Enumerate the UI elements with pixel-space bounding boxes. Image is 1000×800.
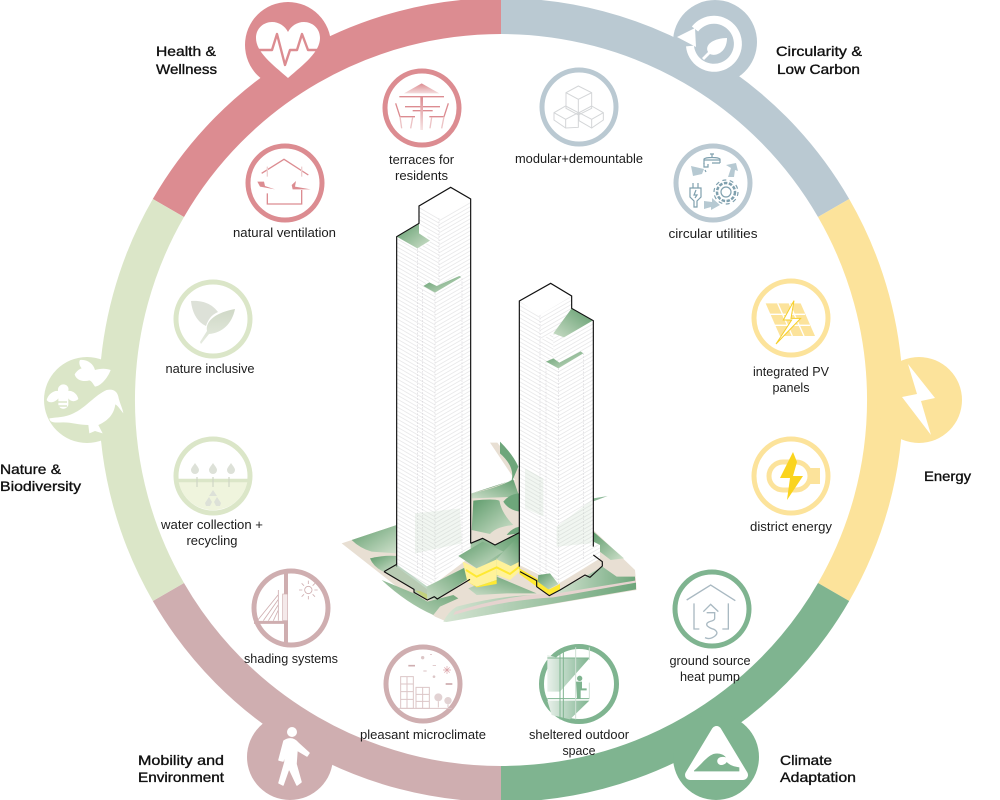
heading: Nature & Biodiversity: Biodiversity	[0, 478, 81, 494]
badge: climate wave triangle	[673, 714, 759, 800]
label: terraces for residents: residents	[395, 168, 449, 183]
label: shading systems: shading systems	[244, 651, 338, 666]
label: integrated PV panels: integrated PV	[753, 364, 829, 379]
yellow base and black site outline	[384, 533, 602, 600]
heading: Nature & Biodiversity: Nature &	[0, 461, 62, 477]
icon: ground source heat pump	[675, 572, 749, 646]
tap	[704, 154, 720, 164]
label: sheltered outdoor space	[529, 727, 630, 758]
heading: Energy: Energy	[924, 468, 971, 484]
heading: Climate Adaptation: Adaptation	[780, 769, 856, 785]
icon: integrated PV panels	[754, 281, 828, 355]
icon: circular utilities	[676, 146, 750, 220]
segment: Climate Adaptation	[501, 592, 834, 784]
label: ground source heat pump: ground source	[670, 653, 750, 668]
heading: Circularity & Low Carbon: Low Carbon	[777, 61, 860, 77]
badge: circular arrow with leaf	[673, 0, 757, 84]
label: district energy: district energy	[750, 519, 833, 534]
segment: Circularity & Low Carbon	[501, 16, 834, 208]
heading: Mobility and Environment	[138, 752, 224, 785]
heading: Mobility and Environment: Environment	[138, 769, 224, 785]
label: integrated PV panels	[753, 364, 829, 395]
badge: energy bolt	[876, 357, 962, 443]
label: ground source heat pump: heat pump	[680, 669, 740, 684]
icon: modular and demountable cubes	[542, 70, 616, 144]
label: pleasant microclimate: pleasant microclimate	[360, 727, 486, 742]
label: nature inclusive: nature inclusive	[166, 361, 254, 376]
icon: district energy battery	[754, 439, 828, 513]
illustration: towers on landscaped site	[342, 187, 637, 622]
site ground	[342, 442, 637, 622]
gear	[721, 187, 731, 197]
heading: Mobility and Environment: Mobility and	[138, 752, 224, 768]
badge: heart health icon	[245, 2, 331, 88]
badge: butterfly bee and bird	[44, 357, 130, 443]
segment: Energy	[834, 208, 885, 592]
plug	[690, 183, 701, 207]
ring: six coloured segments	[117, 16, 885, 784]
heading: Health & Wellness: Wellness	[156, 61, 217, 77]
label: water collection + recycling: water collection +	[160, 517, 263, 532]
label: terraces for residents	[389, 152, 455, 183]
heading: Circularity & Low Carbon: Circularity &	[776, 43, 863, 59]
label: modular+demountable: modular+demountable	[515, 151, 643, 166]
icon: nature inclusive leaves	[176, 282, 250, 356]
icon: pleasant microclimate	[386, 647, 460, 721]
right tower	[519, 283, 600, 584]
heading: Climate Adaptation	[780, 752, 856, 785]
heading: Health & Wellness	[156, 43, 217, 77]
heading: Health & Wellness: Health &	[156, 43, 217, 59]
heading: Circularity & Low Carbon	[776, 43, 863, 77]
segment: Health & Wellness	[168, 16, 501, 208]
segment: Nature & Biodiversity	[117, 208, 168, 592]
icon: butterfly	[75, 360, 111, 387]
label: circular utilities: circular utilities	[668, 226, 758, 241]
icon: water collection and recycling	[176, 439, 250, 513]
icon: bee	[47, 384, 78, 409]
badge: walking person	[247, 714, 333, 800]
label: water collection + recycling: recycling	[186, 533, 238, 548]
label: water collection + recycling	[160, 517, 263, 548]
left tower	[397, 187, 471, 589]
segment: Mobility and Environment	[168, 592, 501, 784]
icon: natural ventilation	[248, 146, 322, 220]
label: ground source heat pump	[670, 653, 750, 684]
icon: bird	[49, 390, 123, 433]
heading: Climate Adaptation: Climate	[780, 752, 832, 768]
label: integrated PV panels: panels	[772, 380, 810, 395]
label: sheltered outdoor space: sheltered outdoor	[529, 727, 630, 742]
podium with yellow floors	[384, 533, 520, 600]
label: sheltered outdoor space: space	[562, 743, 596, 758]
icon: shading systems	[254, 571, 328, 645]
icon: terraces for residents	[385, 71, 459, 145]
icon: sheltered outdoor space	[542, 646, 616, 722]
label: natural ventilation: natural ventilation	[233, 225, 336, 240]
label: terraces for residents: terraces for	[389, 152, 455, 167]
heading: Nature & Biodiversity	[0, 461, 81, 494]
